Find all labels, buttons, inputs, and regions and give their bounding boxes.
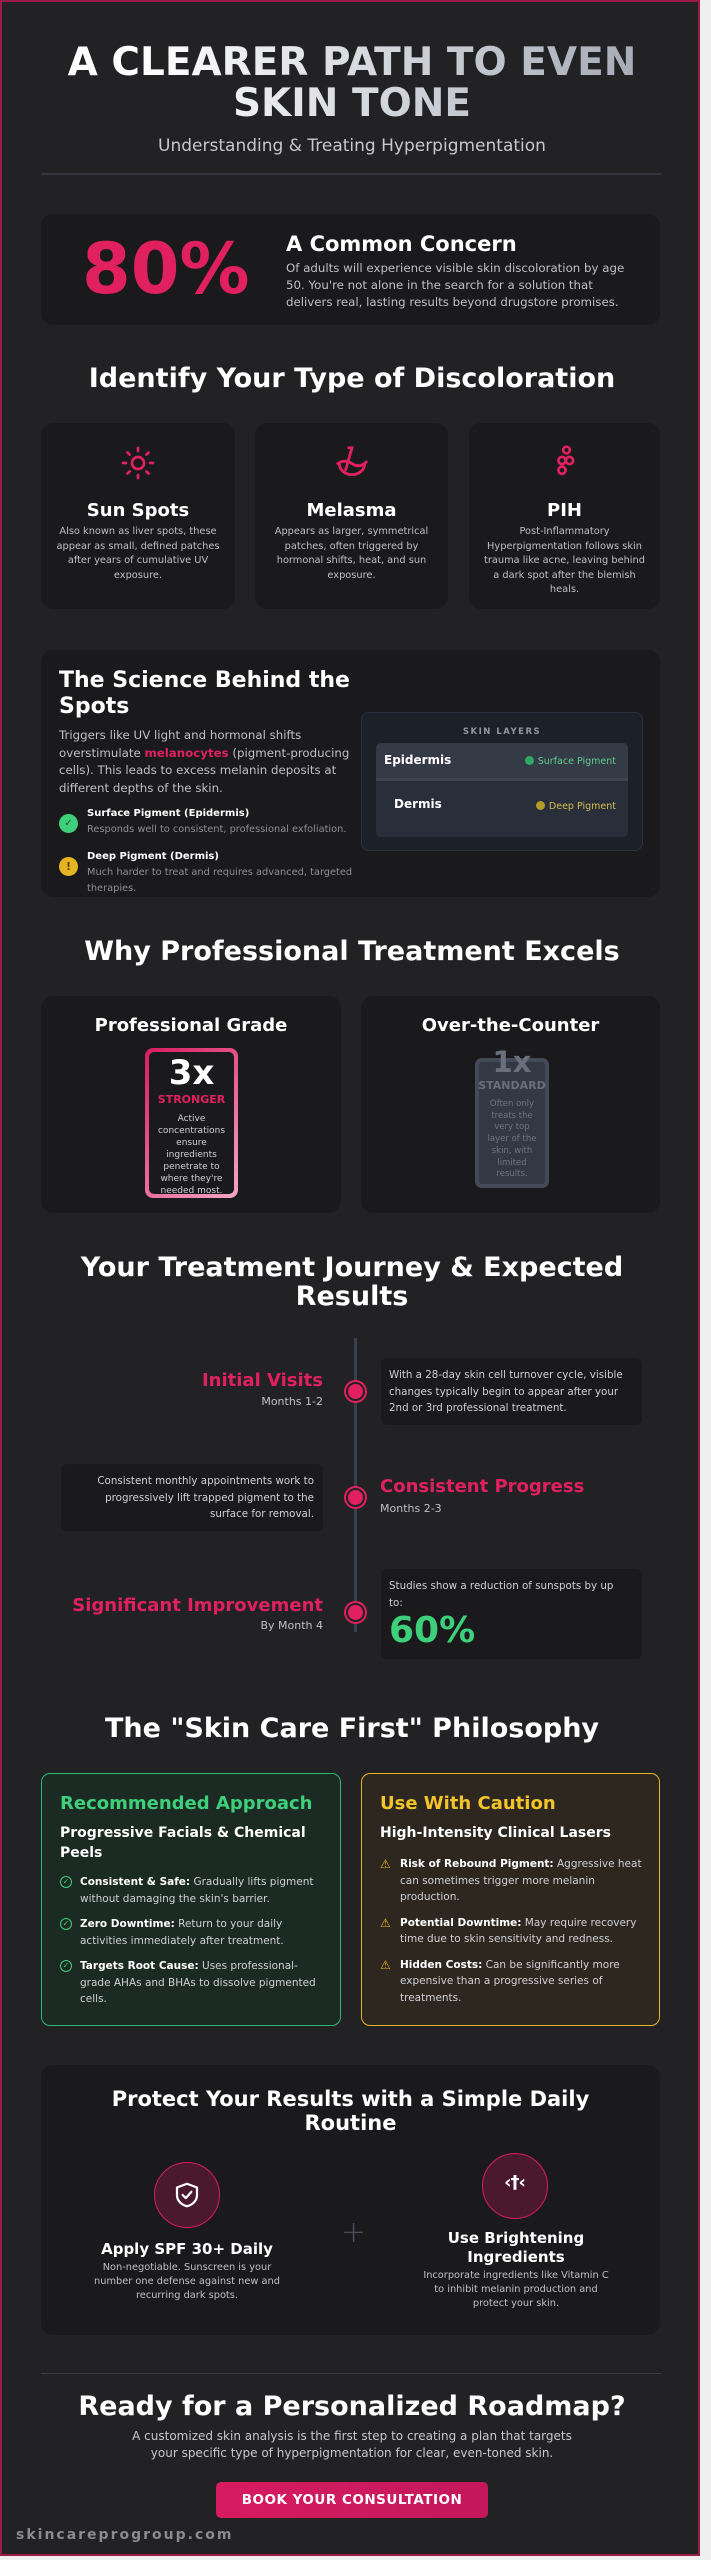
card text: Appears as larger, symmetrical patches, often triggered by hormonal shifts, heat, and sun exposure. (275, 526, 428, 580)
panel: otc: 1x (493, 1045, 531, 1079)
step: spf (94, 2240, 280, 2301)
item: deep (59, 851, 352, 894)
heading: philosophy: The "Skin Care First" Philosophy (105, 1713, 599, 1744)
panel: routine (41, 2065, 660, 2335)
title: SKIN TONE (233, 81, 471, 126)
panel: otc: Over-the-Counter (422, 1015, 599, 1036)
panel: melasma (255, 423, 448, 609)
step 1: With a 28-day skin cell turnover cycle, visible changes typically begin to appear after your 2nd or 3rd professional treatment. (389, 1369, 623, 1414)
list: benefits: Consistent & Safe: Gradually lifts pigment without damaging the skin's barrier. (80, 1876, 314, 1904)
heading: journey (80, 1252, 623, 1312)
icon: shield (154, 2162, 220, 2228)
list: benefits: ✓ (63, 1961, 69, 1970)
step: spf: Apply SPF 30+ Daily (101, 2240, 273, 2258)
item: surface: Responds well to consistent, professional exfoliation. (87, 824, 346, 835)
icon: brightening: ‹†‹ (504, 2172, 525, 2193)
item: deep: Much harder to treat and requires advanced, targeted therapies. (87, 867, 352, 894)
icon: check: ✓ (64, 818, 73, 829)
step 3: Studies show a reduction of sunspots by up to: (389, 1580, 613, 1608)
panel: sun spots (41, 423, 235, 609)
science heading: The Science Behind the (59, 668, 350, 693)
panel: professional: Professional Grade (95, 1015, 287, 1036)
icon: melasma (336, 446, 368, 476)
icon: dots (557, 445, 574, 476)
panel: otc: STANDARD (478, 1079, 546, 1092)
icon: warning: ! (66, 860, 71, 873)
panel: caution (361, 1773, 660, 2026)
icon: sun (122, 446, 154, 480)
box: 1x (475, 1058, 549, 1188)
cta text: A customized skin analysis is the first step to creating a plan that targets your specific type of hyperpigmentation for clear, even-toned skin. (132, 2429, 572, 2460)
box: 3x: Active concentrations ensure ingredients penetrate to where they're needed most. (158, 1114, 225, 1196)
title: A CLEARER PATH TO EVEN (68, 40, 636, 85)
step: brightening: Incorporate ingredients like Vitamin C to inhibit melanin production and protect your skin. (423, 2270, 609, 2309)
card title: Sun Spots (87, 500, 189, 521)
step 3 (72, 1569, 642, 1659)
list: benefits (60, 1876, 316, 2005)
item: surface: Surface Pigment (Epidermis) (87, 808, 249, 819)
box: 3x: STRONGER (158, 1093, 225, 1106)
panel: recommended (41, 1773, 341, 2026)
icon: check (59, 814, 78, 833)
card text: Post-Inflammatory Hyperpigmentation follows skin trauma like acne, leaving behind a dark spot after the blemish heals. (484, 526, 645, 595)
title (2, 42, 702, 124)
heading: journey: Your Treatment Journey & Expected (81, 1252, 623, 1283)
list: benefits: Zero Downtime: Return to your daily activities immediately after treatment. (80, 1918, 284, 1946)
panel: science (41, 650, 660, 897)
list: risks: Potential Downtime: May require recovery time due to skin sensitivity and redness. (400, 1916, 636, 1945)
button (216, 2482, 488, 2518)
box: 3x (145, 1048, 238, 1198)
panel: caution: High-Intensity Clinical Lasers (380, 1825, 611, 1841)
step: brightening: Use Brightening Ingredients (448, 2229, 584, 2266)
panel: pih (469, 423, 660, 609)
card text: Also known as liver spots, these appear as small, defined patches after years of cumulative UV exposure. (57, 526, 219, 580)
layer: dermis: Deep Pigment (549, 801, 616, 812)
layer: dermis: Dermis (394, 797, 442, 811)
item: deep: Deep Pigment (Dermis) (87, 851, 219, 862)
panel: recommended: Recommended Approach (60, 1793, 312, 1814)
heading: identify: Identify Your Type of Discoloration (89, 363, 615, 394)
list: risks: Risk of Rebound Pigment: Aggressive heat can sometimes trigger more melanin production. (400, 1858, 642, 1903)
layer: epidermis: Epidermis (384, 753, 451, 767)
step 3: 60% (389, 1610, 475, 1651)
layer: dermis (376, 781, 628, 837)
stat number: 80% (82, 228, 250, 310)
icon: brightening (482, 2153, 548, 2219)
stat heading: A Common Concern (286, 232, 517, 256)
science heading (59, 668, 350, 719)
layer: epidermis (376, 743, 628, 781)
heading: journey: Results (296, 1281, 408, 1312)
list: risks: ⚠ (380, 1857, 391, 1871)
step 2: Consistent monthly appointments work to progressively lift trapped pigment to the surface for removal. (97, 1475, 314, 1520)
step: spf: Non-negotiable. Sunscreen is your number one defense against new and recurring dark spots. (94, 2262, 280, 2301)
card title: PIH (547, 500, 582, 521)
list: risks: Hidden Costs: Can be significantly more expensive than a progressive series of treatments. (400, 1958, 620, 2004)
step 1 (202, 1358, 642, 1425)
box: 3x: 3x (169, 1053, 214, 1093)
panel: routine: Protect Your Results with a Simple Daily (112, 2087, 589, 2111)
list: benefits: Targets Root Cause: Uses professional-grade AHAs and BHAs to dissolve pigmented cells. (80, 1960, 316, 2005)
panel: routine: Routine (304, 2111, 396, 2135)
diagram: skin layers: SKIN LAYERS (463, 727, 541, 737)
step 2 (62, 1464, 584, 1531)
step 3: Significant Improvement (72, 1595, 323, 1616)
button: BOOK YOUR CONSULTATION (242, 2492, 462, 2508)
heading: cta: Ready for a Personalized Roadmap? (78, 2391, 626, 2422)
layer: epidermis: Surface Pigment (538, 756, 616, 767)
diagram: skin layers (361, 712, 643, 851)
step 2: Months 2-3 (380, 1502, 442, 1515)
science heading: Spots (59, 694, 129, 719)
step 1: Initial Visits (202, 1370, 323, 1391)
panel: stat (41, 214, 660, 325)
list: benefits: ✓ (63, 1919, 69, 1928)
step 3: By Month 4 (260, 1619, 323, 1632)
icon: plus: + (341, 2215, 366, 2250)
panel: recommended: Progressive Facials & Chemical Peels (60, 1825, 306, 1861)
list: benefits: ✓ (63, 1877, 69, 1886)
subtitle: Understanding & Treating Hyperpigmentation (158, 136, 546, 156)
footer: skincareprogroup.com (16, 2527, 233, 2543)
stat text: Of adults will experience visible skin discoloration by age 50. You're not alone in the search for a solution that delivers real, lasting results beyond drugstore promises. (286, 261, 624, 309)
panel: professional (41, 996, 341, 1213)
step 2: Consistent Progress (380, 1476, 584, 1497)
item: surface (59, 808, 346, 835)
timeline (62, 1338, 642, 1659)
icon: warning (59, 857, 78, 876)
panel: otc (361, 996, 660, 1213)
panel: caution: Use With Caution (380, 1793, 556, 1814)
card title: Melasma (306, 500, 397, 521)
list: risks (380, 1857, 642, 2004)
science text: Triggers like UV light and hormonal shifts overstimulate melanocytes (pigment-producing cells). This leads to excess melanin deposits at different depths of the skin. (59, 728, 349, 794)
step: brightening (423, 2229, 609, 2309)
step 1: Months 1-2 (261, 1395, 323, 1408)
list: risks: ⚠ (380, 1916, 391, 1930)
list: risks: ⚠ (380, 1958, 391, 1972)
heading: why: Why Professional Treatment Excels (84, 936, 620, 967)
panel: otc: Often only treats the very top layer of the skin, with limited results. (488, 1099, 536, 1179)
